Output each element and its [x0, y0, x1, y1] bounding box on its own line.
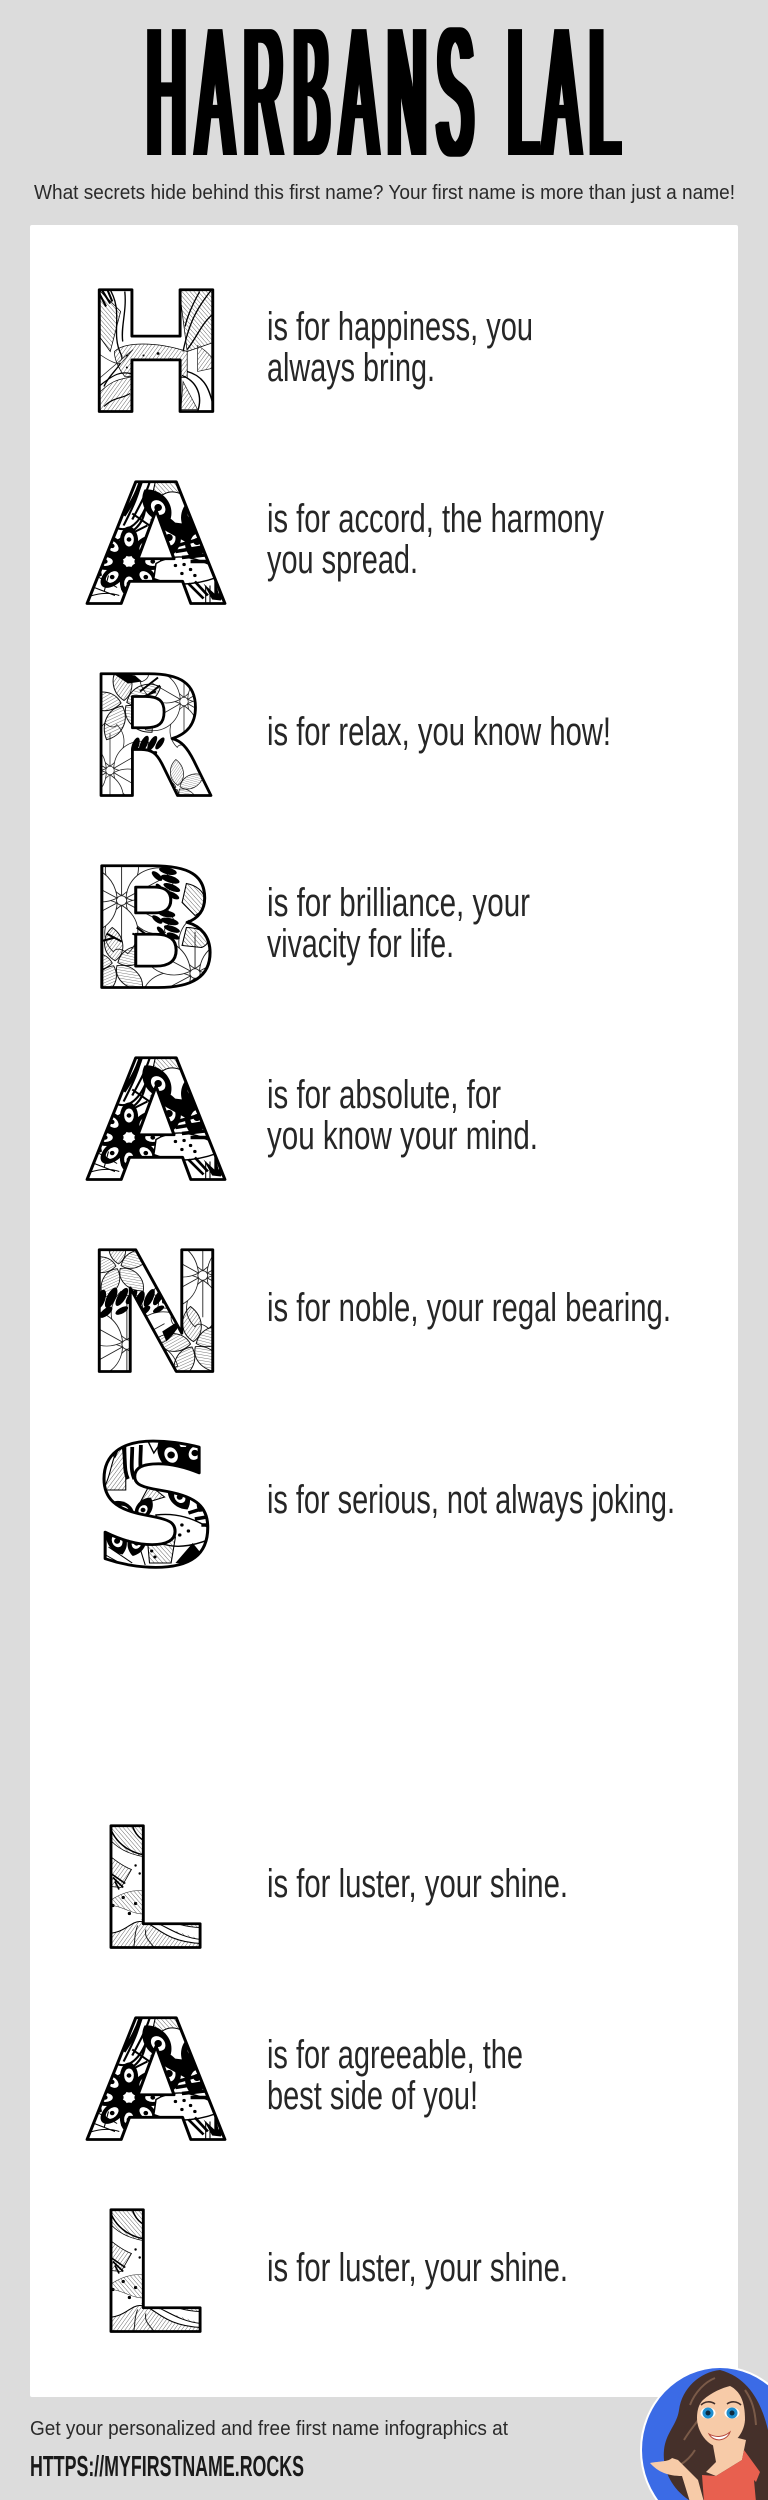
row: N	[52, 1218, 671, 1412]
footer text: Get your personalized and free first name infographics at	[30, 2418, 508, 2440]
text: A meaning: you spread.	[267, 538, 418, 582]
letter A: A	[86, 1025, 226, 1219]
text: H meaning: always bring.	[267, 346, 435, 390]
text: A meaning: best side of you!	[267, 2074, 478, 2118]
letter R: R	[86, 642, 214, 836]
text: A meaning	[267, 1073, 538, 1158]
row: A	[48, 1025, 538, 1219]
row: L	[47, 1793, 568, 1987]
row: H	[52, 258, 533, 452]
row: B	[46, 833, 530, 1027]
text: A meaning: you know your mind.	[267, 1114, 538, 1158]
row: R	[50, 642, 611, 836]
letter B: B	[85, 833, 223, 1027]
text: H meaning	[267, 305, 533, 390]
text: B meaning: is for brilliance, your	[267, 881, 530, 925]
letter S	[102, 1440, 210, 1569]
letter N: N	[83, 1218, 229, 1412]
text: A meaning: is for accord, the harmony	[267, 497, 604, 541]
letter L: L	[95, 2177, 205, 2371]
text: R meaning: is for relax, you know how!	[267, 710, 611, 754]
text: L meaning: is for luster, your shine.	[267, 1862, 568, 1906]
text: B meaning	[267, 881, 530, 966]
letter N	[98, 1248, 214, 1373]
text: B meaning: vivacity for life.	[267, 922, 454, 966]
letter A	[86, 1056, 226, 1181]
icon: avatar	[640, 2366, 768, 2500]
letter S: S	[91, 1410, 221, 1604]
row: A	[48, 1985, 523, 2179]
letter A: A	[86, 1985, 226, 2179]
text: A meaning	[267, 497, 604, 582]
letter A	[86, 480, 226, 605]
text: A meaning: is for agreeable, the	[267, 2033, 523, 2077]
row: S	[102, 1440, 672, 1569]
subtitle: What secrets hide behind this first name? Your first name is more than just a name!	[34, 182, 735, 204]
letter R	[100, 672, 212, 797]
letter L	[110, 1824, 202, 1949]
letter H	[98, 288, 214, 413]
text: A meaning: is for absolute, for	[267, 1073, 501, 1117]
letter L: L	[95, 1793, 205, 1987]
letter L	[110, 2208, 202, 2333]
row: A	[48, 449, 604, 643]
text: H meaning: is for happiness, you	[267, 305, 533, 349]
letter A: A	[86, 449, 226, 643]
letter B	[100, 864, 212, 989]
row: L	[47, 2177, 568, 2371]
footer link: HTTPS://MYFIRSTNAME.ROCKS	[30, 2451, 304, 2483]
letter H: H	[83, 258, 229, 452]
text: A meaning	[267, 2033, 523, 2118]
text: L meaning: is for luster, your shine.	[267, 2246, 568, 2290]
letter A	[86, 2016, 226, 2141]
